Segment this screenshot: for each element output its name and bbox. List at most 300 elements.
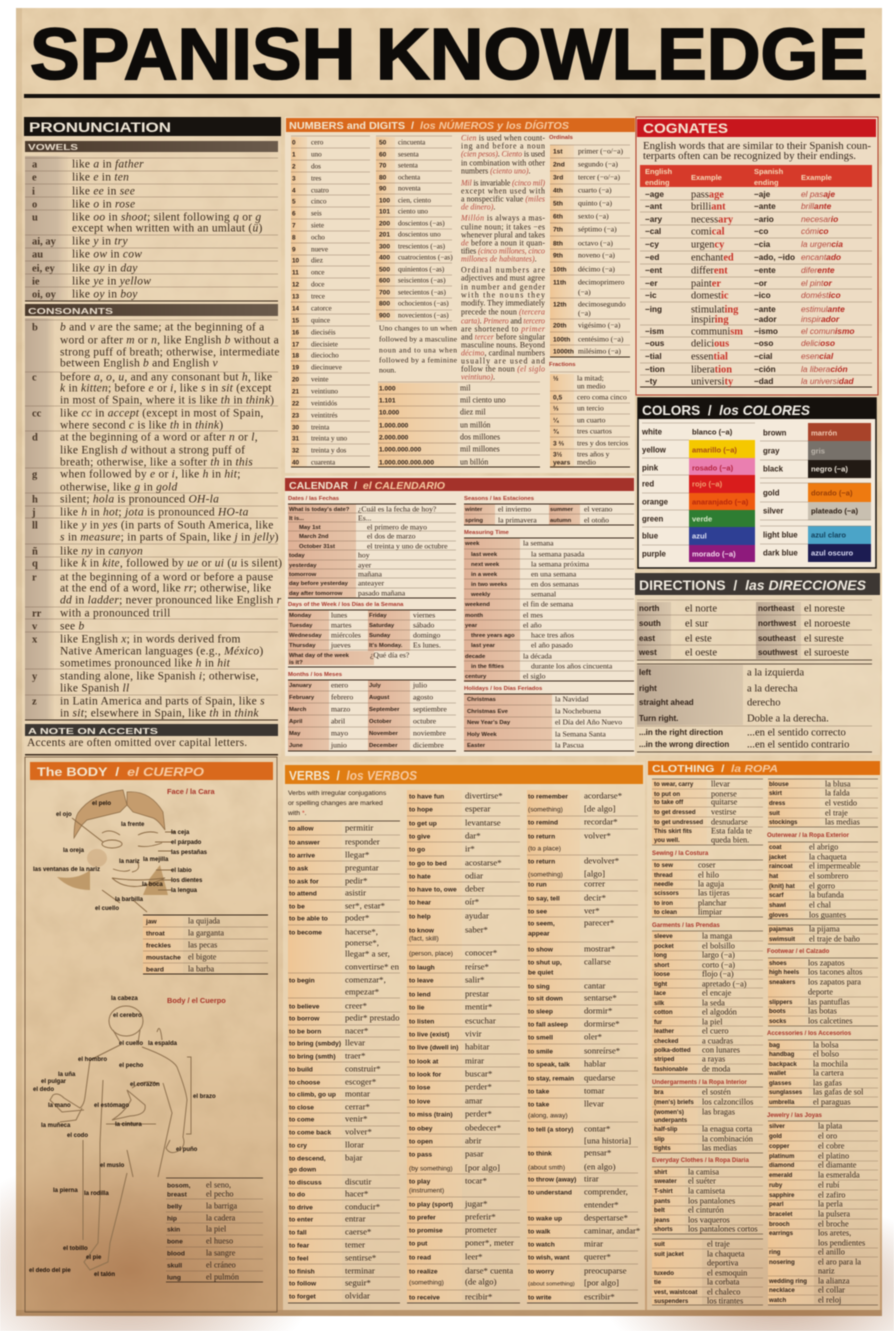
cognates table: −ante [754,305,776,314]
verbs column 3: parecer* [584,918,614,928]
verbs column 3: to remind [528,820,558,826]
heading: verbs: VERBS / los VERBOS [289,769,418,783]
verbs column 3: to return [528,858,555,866]
days of the week: What day of the week [289,653,350,659]
verbs column 3: sentarse* [584,992,617,1002]
verbs column 2: acostarse* [465,858,502,868]
numbers table 50-900: 100 [379,198,390,204]
dates: It is... [289,516,304,522]
measuring time: in a week [471,572,498,578]
verbs column 3: to sleep [528,1008,553,1016]
jewelry: la esmeralda [818,1170,860,1180]
fractions table: un cuarto [577,416,606,424]
measuring time: la semana pasada [531,550,585,558]
verbs column 2: escuchar [465,1016,496,1026]
consonants table: g [32,470,38,480]
body labels: la cabeza [111,996,138,1002]
days of the week: viernes [413,610,435,620]
cognates table: delicious [691,338,729,350]
verbs column 2: salir* [465,974,485,984]
dates: today [289,553,305,559]
numbers table 0-40: 40 [292,460,300,466]
footwear: socks [769,1018,787,1025]
ordinals table: milésimo (−a) [578,346,621,356]
heading: directions [635,573,880,595]
table header: Example [691,173,722,182]
sewing [652,850,730,916]
verbs column 3: tomar [584,1086,605,1096]
jewelry: el oro [818,1132,837,1140]
accessories: las gafas de sol [813,1088,864,1096]
days of the week: Saturday [369,623,395,629]
verbs column 3: (along, away) [528,1112,568,1120]
sewing: coser [698,860,716,870]
verbs column 2: to help [409,914,431,920]
clothing verbs: to take off [654,799,684,806]
measuring time: semanal [531,590,556,598]
jewelry: necklace [769,1287,795,1294]
ordinals table: 20th [553,322,567,330]
verbs column 3: volver* [584,830,611,840]
cognates table: −ente [754,266,776,275]
vowels table: ie [32,276,40,288]
cognates table [645,189,855,388]
directions table: west [638,648,657,657]
verbs column 1: to allow [289,826,314,832]
verbs column 2: to hear [409,900,431,906]
verbs column 2: esperar [465,804,490,814]
consonants table: q [32,558,38,570]
seasons: Seasons / las Estaciones [464,496,535,502]
left swatches [689,440,755,562]
garments: sleeve [654,933,673,940]
verbs column 1: construir* [345,1064,381,1074]
verbs column 3: comprender, [584,1186,628,1196]
numbers table 0-40: catorce [311,304,332,312]
notes on numbers: usually are used and [461,356,545,366]
verbs column 2: to have to, owe [409,886,457,894]
verbs column 2: tocar* [465,1176,487,1186]
vowels table: u [32,212,38,224]
large numbers table [379,384,506,466]
verbs column 3: to sit down [528,996,563,1002]
large numbers table: dos millones [460,432,500,442]
numbers table 0-40: 23 [292,412,300,420]
consonants table: in most of Spain, where it is like th in think) [60,394,274,406]
months: febrero [331,692,353,702]
color labels: blanco (−a) [692,428,733,436]
garments: con lunares [702,1046,740,1054]
dates: March 2nd [299,534,329,540]
color labels: silver [763,506,783,516]
directions table: southeast [758,634,796,643]
numbers table 0-40: 30 [292,424,300,432]
body table: el pecho [206,1190,234,1198]
verbs column 3: sonreírse* [584,1046,620,1056]
title: SPANISH KNOWLEDGE [30,15,868,95]
measuring time: last year [471,643,496,649]
color labels: azul oscuro [811,548,854,558]
blouses: suit [769,810,780,817]
months: October [369,719,392,725]
numbers table 0-40: 3 [292,176,296,182]
undergarments: los calzoncillos [702,1098,753,1106]
holidays: Holy Week [467,732,497,738]
color labels: rosado (−a) [692,464,734,472]
verbs column 1: llorar [345,1140,364,1150]
cognates table: −age [645,190,664,199]
verbs column 1: to attend [289,890,317,898]
numbers table 0-40: siete [311,222,324,230]
sewing: thread [654,872,673,879]
accessories: umbrella [769,1099,795,1106]
body labels: la cintura [115,1122,142,1128]
verbs column 1: entrar [345,1214,366,1224]
garments: a rayas [702,1054,725,1064]
body labels: el puño [176,1147,198,1153]
consonants table [25,318,282,720]
verbs column 3: caminar, andar* [584,1226,640,1236]
sewing: planchar [698,898,727,908]
face table: el bigote [188,952,217,962]
measuring time: month [465,613,483,619]
ordinals table: 8th [553,240,563,248]
shading columns [291,137,574,468]
body labels: el cuello [119,1041,143,1047]
garments: checked [654,1038,679,1045]
verbs column 2: (by something) [409,1166,453,1172]
numbers table 0-40: 18 [292,352,300,360]
verbs column 3: to shut up, [528,960,562,966]
months: April [289,719,303,725]
sewing: to sew [654,862,673,869]
notes on numbers: and tercer before singular [461,332,545,342]
verbs column 3: correr [584,878,605,888]
clothing verbs: vestirse [711,808,737,816]
footwear: sneakers [769,979,796,986]
sewing: scissors [654,890,679,897]
numbers table 50-900: 500 [379,266,390,274]
verbs column 2: to laugh [409,964,435,972]
cognates table: diferente [801,265,835,275]
verbs column 3: querer* [584,1252,611,1262]
verbs column 2: mirar [465,1056,484,1066]
everyday clothes: el cinturón [688,1206,725,1214]
numbers table 0-40: veintidós [311,400,337,408]
accessories: glasses [769,1080,792,1087]
fractions table: 3½ [553,450,563,458]
verbs column 1: to finish [289,1268,315,1276]
vowels table: au [32,250,43,260]
verbs column 2: to put [409,1240,428,1248]
consonants table: with a pronounced trill [60,608,171,620]
verbs column 1: permitir [345,822,373,832]
days of the week: domingo [413,630,440,640]
table header: Spanish [754,167,784,176]
dates: May 1st [299,525,321,531]
body labels: el pulgar [41,1079,67,1085]
consonants table: in sit; elsewhere in Spain, like th in think [60,708,259,720]
face labels: la frente [121,822,145,828]
outerwear: swimsuit [769,936,795,943]
measuring time: hace tres años [531,630,574,640]
verbs column 3: devolver* [584,856,619,866]
notes on numbers: follow the noun (el siglo [461,364,545,374]
cognates table: enchanted [691,252,734,264]
months: November [369,731,399,737]
footwear: high heels [769,969,800,976]
outerwear: el abrigo [809,842,838,852]
days of the week: Friday [369,613,387,619]
notes on numbers: numbers (ciento uno). [461,166,530,176]
numbers table 0-40: 0 [292,140,296,146]
verbs column 3: entender* [584,1200,619,1210]
everyday clothes: T-shirt [654,1188,673,1195]
numbers table 50-900: 600 [379,278,390,284]
face table: la quijada [188,916,220,926]
cognates table: −cal [645,227,661,236]
body table: skull [167,1262,182,1270]
clothing verbs: to wear, carry [654,781,694,788]
verbs column 1: asistir [345,888,366,898]
vowels table: like oo in shoot; silent following q or g [72,212,261,224]
verbs column 1: to cry [289,1142,307,1150]
numbers table 50-900: 300 [379,244,390,250]
consonants table: b and v are the same; at the beginning of a [60,322,264,334]
intro: Verbs with irregular conjugations [288,790,387,797]
seasons: la primavera [498,516,537,524]
ordinals table: 9th [553,252,563,260]
numbers table 50-900: 80 [379,174,387,182]
shading [288,504,580,751]
jewelry: los pendientes [818,1238,865,1248]
verbs column 3: to say, tell [528,896,560,902]
numbers table 0-40 [292,138,348,466]
jewelry: silver [769,1123,786,1130]
cognates table: −co [754,227,768,236]
vowels table: o [32,200,37,210]
heading: the body [30,762,273,780]
verbs column 2: to play [409,1178,431,1186]
body labels: la pierna [53,1188,78,1194]
numbers table 50-900: ciento uno [398,208,428,216]
verbs column 1: to enter [289,1216,314,1224]
measuring time: Measuring Time [464,530,509,536]
panel: clothing [647,760,880,1310]
verbs column 3 [528,790,640,1302]
directions phrases: a la izquierda [747,668,804,678]
numbers table 50-900: doscientos uno [398,230,441,238]
garments: silk [654,1000,665,1007]
months: enero [331,680,348,690]
consonants table: like y in yes (in parts of South America, like [60,520,274,532]
large numbers table: 1.000.000.000.000 [379,460,434,466]
notes on numbers: tifies (cinco millones, cinco [461,246,545,256]
verbs column 1: montar [345,1088,370,1098]
verbs column 2: levantarse [465,818,501,828]
heading: cognates: COGNATES [643,120,728,136]
vowels table: ei, ey [32,264,55,274]
months: June [289,743,303,749]
notes on numbers: ing and before a noun [461,142,545,150]
notes on numbers: except when used with [461,186,545,196]
numbers table 50-900: ochenta [398,174,421,182]
garments [652,922,747,1074]
body table: lung [167,1274,181,1282]
fractions table: ¼ [553,416,559,424]
verbs column 3: to take [528,1088,550,1096]
consonants table: s in measure; in parts of Spain, like j in jelly) [60,532,279,544]
heading: pronunciation: PRONUNCIATION [29,120,171,135]
undergarments: las bragas [702,1108,735,1116]
cognates table: comical [691,226,725,238]
holidays: Holidays / los Días Feriados [464,686,543,692]
garments: el algodón [702,1008,738,1016]
jewelry: ruby [769,1182,783,1189]
verbs column 1: to come [289,1116,315,1124]
cognates table: brilliant [691,202,726,212]
jewelry: el aro para la [818,1258,861,1266]
dates: yesterday [289,563,317,569]
verbs column 3: to smell [528,1034,553,1042]
months: March [289,707,307,713]
accessories [767,1030,864,1106]
verbs column 2: to look at [409,1058,439,1066]
everyday clothes: Everyday Clothes / la Ropa Diaria [652,1157,749,1164]
cognates table: communism [691,326,743,338]
cognates table: brillante [801,201,832,211]
body table: la sangre [206,1248,236,1258]
numbers table 50-900: 50 [379,140,387,146]
fractions table: tres cuartos [577,426,612,436]
garments: short [654,962,669,969]
body labels: la rodilla [84,1191,109,1197]
verbs column 3: hablar [584,1058,606,1068]
days of the week: It's Monday. [369,643,403,649]
jewelry: pearl [769,1201,784,1208]
notes on numbers: modify. They immediately [461,298,545,308]
sewing: to iron [654,900,673,907]
jewelry: bracelet [769,1211,792,1218]
formal clothes [654,1240,748,1306]
accessories: el bolso [813,1050,839,1058]
undergarments: half-slip [654,1126,678,1133]
dates: el treinta y uno de octubre [367,542,448,550]
verbs column 1: llegar* a ser, [345,948,390,958]
garments: corto (−a) [702,960,735,970]
verbs column 1: to become [289,930,322,936]
body labels: el dedo [33,1087,54,1093]
measuring time: weekend [464,602,490,608]
color labels: anaranjado (−a) [692,498,749,506]
color labels: red [642,480,654,488]
holidays: la Nochebuena [555,706,601,716]
outerwear: gloves [769,912,789,919]
garments: largo (−a) [702,950,735,960]
garments: striped [654,1056,675,1063]
verbs column 3: cantar [584,980,606,990]
numbers table 0-40: dos [311,162,321,170]
consonants table: strong puff of breath; otherwise, intermediate [60,346,280,358]
months: July [369,683,382,689]
body table: el cráneo [206,1260,236,1270]
verbs column 3: llevar [584,1098,604,1108]
consonants table: k in kitten; before e or i, like s in sit (except [60,382,272,394]
sewing: las tijeras [698,888,730,898]
measuring time: el siglo [523,672,546,680]
numbers table 0-40: treinta y dos [311,446,347,454]
vowels table: like a in father [72,158,144,170]
cognates table: la universidad [801,376,854,386]
panel: directions [635,573,880,755]
heading: pronunciation [24,117,281,136]
verbs column 1: volver* [345,1126,372,1136]
numbers table 0-40: 6 [292,210,296,218]
vowels table: ai, ay [32,236,57,248]
verbs column 2: prometer [465,1224,497,1234]
color labels: marrón [811,428,838,438]
verbs column 1: nacer* [345,1026,368,1036]
verbs column 2: (instrument) [409,1188,444,1194]
intro [287,790,387,817]
everyday clothes: la camiseta [688,1186,725,1196]
verbs column 1: to do [289,1192,305,1198]
numbers table 0-40: doce [311,280,324,288]
color labels: yellow [642,446,667,454]
body labels: el dedo del pie [29,1268,71,1274]
clothing verbs: to put on [654,791,680,798]
body labels: la mano [48,1103,71,1109]
verbs column 1: seguir* [345,1278,371,1288]
fractions table: tres y dos tercios [577,438,628,448]
color labels: pink [642,464,659,472]
consonants table: at the beginning of a word or before a pause [60,572,273,584]
outerwear: coat [769,844,782,851]
verbs column 1: to answer [289,840,320,846]
footwear: los zapatos [808,958,845,968]
notes on numbers: are shortened to primer [461,324,546,334]
heading: consonants: CONSONANTS [28,306,113,316]
heading: calendar [285,478,634,492]
intro text: English words that are similar to their Spanish coun- [643,141,871,152]
numbers table 0-40: 9 [292,246,296,254]
measuring time: three years ago [471,633,515,639]
directions phrases: left [639,668,651,677]
ordinals table: quinto (−a) [578,198,612,208]
numbers table 0-40: 14 [292,306,300,312]
verbs column 2: to look for [409,1072,442,1078]
months: August [369,695,389,701]
verbs column 3: to tell (a story) [528,1126,573,1134]
measuring time: la semana [523,538,554,548]
cognates table: −tial [645,352,662,361]
color labels: light blue [763,530,798,540]
blouses: el vestido [825,798,857,808]
panel: the body [25,757,277,1312]
seasons: el invierno [498,504,531,514]
large numbers table: mil ciento uno [460,396,506,404]
everyday clothes: jeans [653,1217,670,1224]
months: February [289,695,315,701]
footwear: los calcetines [808,1016,852,1026]
consonants table: c [32,372,37,384]
table header: ending [754,178,779,187]
jewelry: diamond [769,1162,795,1169]
numbers table 0-40: 32 [292,448,300,454]
numbers table 0-40: tres [311,174,322,182]
verbs column 3: (to a place) [528,846,561,852]
months: junio [330,740,347,750]
